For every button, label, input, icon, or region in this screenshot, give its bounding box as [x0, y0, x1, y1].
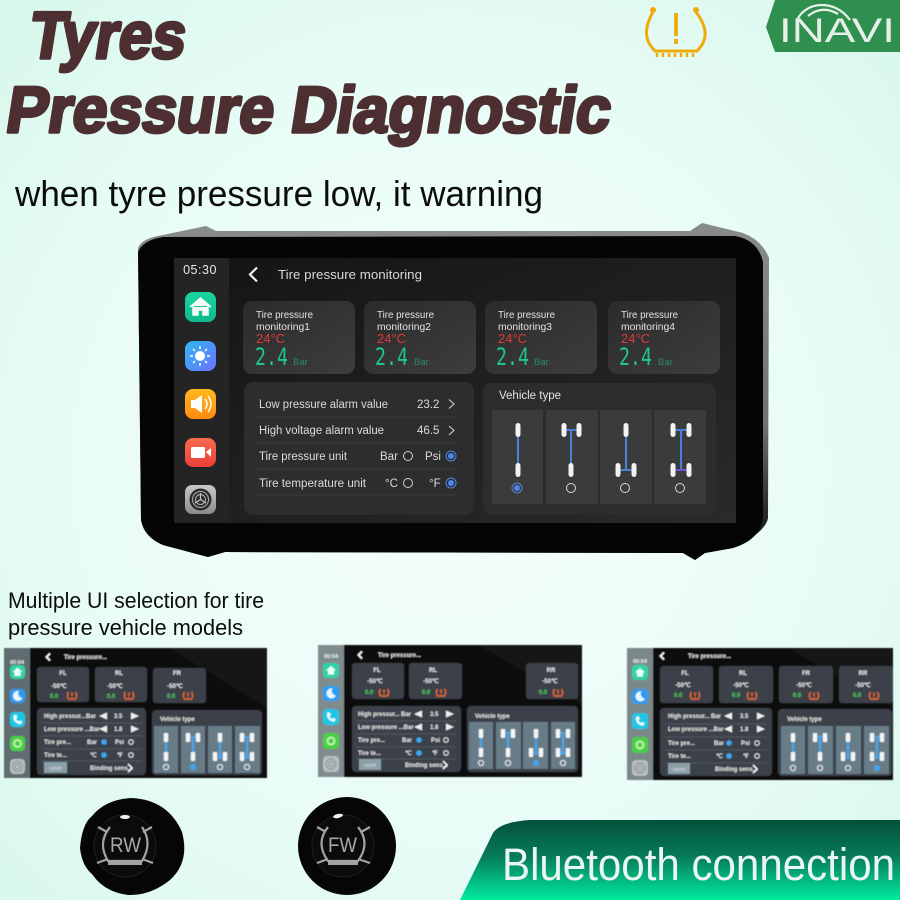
screenshot 2	[318, 645, 582, 777]
settings panel: Bar	[87, 740, 98, 746]
settings panel: Tire te...	[358, 751, 381, 757]
vehicle panel	[152, 710, 262, 775]
settings panel	[660, 708, 772, 776]
title: Pressure Diagnostic: Pressure Diagnostic	[2, 73, 617, 146]
panel: tyre 4: monitoring4	[621, 321, 675, 333]
tyre cards	[37, 667, 206, 703]
clock: 05:30	[183, 263, 217, 277]
tyre cards: RR	[547, 668, 556, 674]
panel: tyre 2: Bar	[414, 357, 429, 368]
panel: vehicle type	[483, 383, 716, 515]
settings panel: 3.5	[430, 712, 439, 718]
tyre cards: -50℃	[796, 682, 812, 689]
settings panel: Psi	[741, 741, 750, 747]
tyre cards: -50℃	[107, 683, 123, 690]
panel: alarm settings: High voltage alarm value	[259, 425, 384, 437]
vehicle panel	[778, 709, 892, 776]
panel: tyre 1: Bar	[293, 357, 308, 368]
settings panel	[37, 708, 146, 775]
panel: tyre 2: Tire pressure	[377, 309, 434, 321]
panel: tyre 1: 2.4	[255, 343, 288, 371]
settings panel: ℉	[432, 750, 438, 757]
text: multiple UI selection: pressure vehicle models	[8, 615, 243, 640]
tyre cards: 0.0	[50, 694, 59, 700]
device: head unit	[138, 223, 769, 560]
panel: tyre 3: 24°C	[498, 331, 527, 346]
settings panel: High pressur...	[668, 714, 710, 720]
panel: tyre 1: monitoring1	[256, 321, 310, 333]
panel: alarm settings: Psi	[425, 451, 441, 463]
settings panel	[352, 706, 461, 772]
sensor: RW: RW	[110, 834, 141, 857]
settings panel: Tire pre...	[358, 738, 385, 744]
screenshot 1: Tire pressure...	[64, 655, 107, 661]
panel: tyre 2: monitoring2	[377, 321, 431, 333]
settings panel: Bar	[714, 741, 725, 747]
tyre cards: RL	[429, 668, 437, 674]
tyre cards: FL	[59, 671, 67, 677]
panel: alarm settings	[244, 382, 474, 515]
tyre cards: RL	[115, 671, 123, 677]
panel: tyre 3: Bar	[534, 357, 549, 368]
settings panel: Tire pre...	[44, 740, 71, 746]
settings panel: reset	[673, 767, 686, 773]
title: Tyres: Tyres	[25, 0, 192, 73]
tyre cards: -50℃	[167, 683, 183, 690]
panel: tyre 1: Tire pressure	[256, 309, 313, 321]
logo: iNAVI	[766, 0, 900, 52]
screenshot 3: 00:04	[633, 659, 648, 665]
tyre cards: 0.0	[539, 690, 548, 696]
panel: alarm settings: 46.5	[417, 425, 439, 437]
screenshot 3: Tire pressure...	[688, 654, 731, 660]
tyre cards: RL	[739, 671, 747, 677]
settings panel: Tire te...	[44, 753, 67, 759]
tyre cards: -50℃	[367, 678, 383, 685]
tyre cards: 0.0	[732, 693, 741, 699]
panel: tyre 4: Tire pressure	[621, 309, 678, 321]
panel: alarm settings: Low pressure alarm value	[259, 399, 388, 411]
tyre cards: -50℃	[423, 678, 439, 685]
panel: tyre 4: Bar	[658, 357, 673, 368]
settings panel: Binding sens...	[405, 763, 448, 769]
panel: alarm settings: Tire temperature unit	[259, 478, 367, 490]
settings panel: High pressur...	[44, 714, 86, 720]
panel: tyre 4: 2.4	[619, 343, 652, 371]
screenshot 1	[4, 648, 267, 778]
settings panel: Low pressure ...Bar	[44, 727, 100, 733]
panel: tyre 3: 2.4	[496, 343, 529, 371]
settings panel: ℉	[117, 752, 123, 759]
icon: home	[185, 292, 216, 322]
panel: tyre 2	[364, 301, 476, 374]
screenshot 2: Tire pressure...	[378, 653, 421, 659]
sidebar	[174, 258, 229, 523]
settings panel: Bar	[711, 714, 722, 720]
settings panel: Low pressure ...Bar	[668, 727, 724, 733]
vehicle option 2	[562, 423, 582, 492]
vehicle panel	[467, 706, 578, 772]
vehicle option 1	[512, 423, 522, 493]
tyre cards: -50℃	[855, 682, 871, 689]
tyre cards: 0.0	[674, 693, 683, 699]
tyre cards: -50℃	[675, 682, 691, 689]
settings panel: Bar	[401, 712, 412, 718]
icon: settings	[185, 485, 216, 514]
settings panel: Psi	[115, 740, 124, 746]
device casing	[138, 223, 769, 560]
tyre cards	[660, 666, 893, 703]
panel: alarm settings: °F	[429, 478, 441, 490]
panel: tyre 4	[608, 301, 720, 374]
panel: tyre 4: 24°C	[621, 331, 650, 346]
settings panel: ℃	[716, 753, 723, 760]
tyre cards: FL	[681, 671, 689, 677]
tyre cards: FR	[173, 671, 182, 677]
tyre cards: FR	[802, 671, 811, 677]
vehicle option 4	[670, 423, 692, 492]
settings panel: ℉	[743, 753, 749, 760]
screen	[174, 258, 736, 523]
tyre cards: 0.0	[107, 694, 116, 700]
icon: tyre pressure warning	[646, 7, 705, 57]
settings panel: reset	[364, 763, 377, 769]
logo: iNAVI: INAVI	[779, 12, 895, 50]
tyre cards: 0.0	[167, 694, 176, 700]
vehicle panel: Vehicle type	[160, 717, 195, 723]
panel: tyre 2: 24°C	[377, 331, 406, 346]
sensor: FW: FW	[328, 834, 357, 857]
tyre cards: FL	[373, 668, 381, 674]
panel: tyre 3	[485, 301, 597, 374]
settings panel: ℃	[405, 750, 412, 757]
settings panel: ℃	[90, 752, 97, 759]
settings panel: Tire pre...	[668, 741, 695, 747]
screen heading: Tire pressure monitoring	[278, 267, 422, 282]
subtitle: when tyre pressure low, it warning	[14, 173, 543, 214]
panel: alarm settings: Bar	[380, 451, 398, 463]
tyre cards: RR	[859, 671, 868, 677]
settings panel: Psi	[431, 738, 440, 744]
vehicle option 3	[616, 423, 636, 492]
tyre cards: 0.0	[793, 693, 802, 699]
tyre cards: -50℃	[51, 683, 67, 690]
tyre cards	[352, 663, 578, 699]
tyre cards: -50℃	[542, 678, 558, 685]
panel: tyre 3: Tire pressure	[498, 309, 555, 321]
settings panel: Binding sens...	[715, 767, 758, 773]
tyre cards: 0.0	[365, 690, 374, 696]
screenshot 1: 00:04	[10, 660, 25, 666]
icon: brightness	[185, 341, 216, 371]
settings panel: Bar	[402, 738, 413, 744]
panel: tyre 1	[243, 301, 355, 374]
text: multiple UI selection	[8, 588, 264, 640]
vehicle panel: Vehicle type	[787, 717, 822, 723]
sensor: FW	[298, 797, 396, 895]
settings panel: Binding sens...	[90, 766, 133, 772]
settings panel: High pressur...	[358, 712, 400, 718]
sensor: RW	[80, 798, 184, 895]
panel: alarm settings: Tire pressure unit	[259, 451, 348, 463]
panel: vehicle type: Vehicle type	[499, 390, 561, 402]
banner: Bluetooth connection	[460, 820, 900, 900]
settings panel: Tire te...	[668, 754, 691, 760]
settings panel: 3.5	[740, 714, 749, 720]
tyre cards: -50℃	[733, 682, 749, 689]
settings panel: Low pressure ...Bar	[358, 725, 414, 731]
settings panel: 1.8	[430, 725, 439, 731]
screenshot 3	[627, 648, 893, 780]
vehicle panel: Vehicle type	[475, 714, 510, 720]
icon: camera	[185, 438, 216, 467]
panel: tyre 3: monitoring3	[498, 321, 552, 333]
icon: back chevron	[250, 268, 257, 282]
panel: alarm settings: °C	[385, 478, 398, 490]
settings panel: Bar	[86, 714, 97, 720]
settings panel: reset	[49, 766, 62, 772]
panel: alarm settings: 23.2	[417, 399, 439, 411]
settings panel: 3.5	[114, 714, 123, 720]
text: multiple UI selection: Multiple UI selection for tire	[8, 588, 264, 613]
tyre cards: 0.0	[422, 690, 431, 696]
panel: tyre 2: 2.4	[375, 343, 408, 371]
screenshot 2: 00:04	[324, 654, 339, 660]
settings panel: 1.8	[114, 727, 123, 733]
panel: tyre 1: 24°C	[256, 331, 285, 346]
tyre cards: 0.0	[853, 693, 862, 699]
settings panel: 1.8	[740, 727, 749, 733]
icon: volume	[185, 389, 216, 419]
